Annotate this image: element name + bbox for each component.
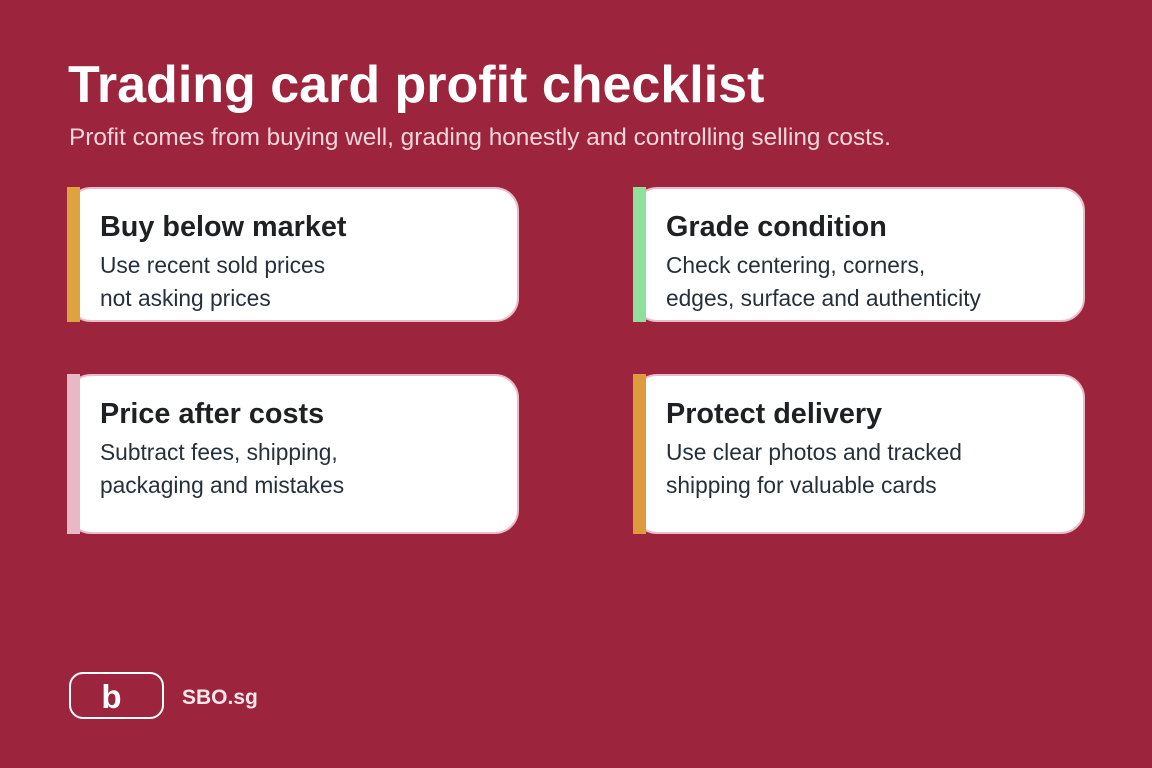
body text: shipping for valuable cards [666,472,937,498]
logo badge: b [101,678,122,715]
panel: grade condition [633,187,1085,322]
accent bar [633,374,646,534]
brand name: SBO.sg [182,686,258,709]
card background [633,374,1085,534]
body text [100,439,344,498]
body text: not asking prices [100,285,271,311]
body text: Check centering, corners, [666,252,925,278]
body text: Use recent sold prices [100,252,325,278]
heading: Buy below market [100,211,346,243]
panel: protect delivery [633,374,1085,534]
body text [666,439,962,498]
panel: buy below market [67,187,519,322]
panel: price after costs [67,374,519,534]
body text [666,252,981,311]
card background [633,187,1085,322]
card background [67,187,519,322]
heading: Price after costs [100,398,324,430]
title: Trading card profit checklist [68,56,764,114]
logo badge [69,672,164,719]
heading: Protect delivery [666,398,882,430]
body text: packaging and mistakes [100,472,344,498]
subtitle: Profit comes from buying well, grading honestly and controlling selling costs. [69,124,891,151]
body text: Use clear photos and tracked [666,439,962,465]
body text: edges, surface and authenticity [666,285,981,311]
body text: Subtract fees, shipping, [100,439,338,465]
heading: Grade condition [666,211,887,243]
card background [67,374,519,534]
accent bar [67,374,80,534]
accent bar [67,187,80,322]
body text [100,252,325,311]
accent bar [633,187,646,322]
